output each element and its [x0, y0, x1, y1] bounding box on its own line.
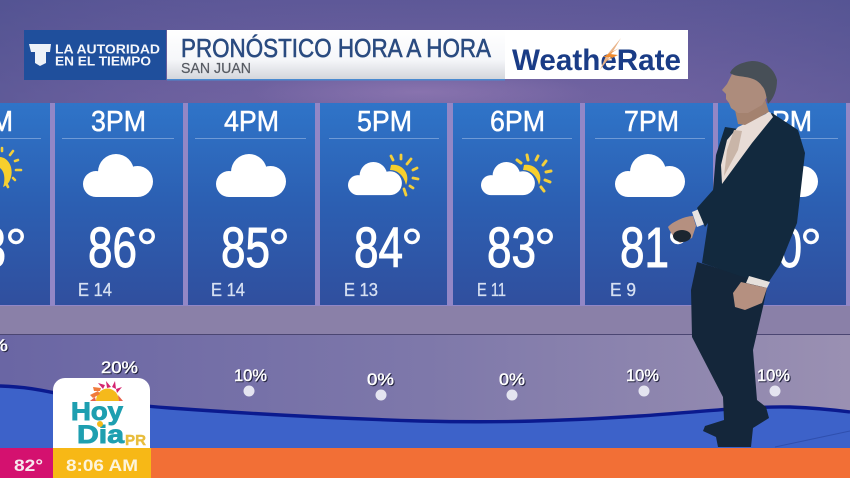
- icon: sun and cloud: [481, 155, 551, 195]
- card: 7PM: 7PM: [624, 106, 679, 138]
- header: WeatheRate logo: [505, 30, 688, 79]
- header: Telemundo tag: [24, 30, 166, 80]
- icon: cloud: [216, 154, 286, 197]
- time chip: 8:06 AM: [66, 456, 138, 475]
- jacket: [697, 113, 805, 283]
- icon: cloud: [83, 154, 153, 197]
- presenter: [668, 61, 805, 447]
- far hand and cuff: [668, 216, 696, 243]
- icon: cloud: [615, 154, 685, 197]
- card: 6PM: 6PM: [490, 106, 545, 138]
- hair: [730, 61, 777, 104]
- card: 7PM: E 9: [610, 280, 636, 300]
- card: 4PM: E 14: [211, 280, 245, 300]
- card: 7PM: 81: [620, 216, 669, 280]
- card: 3PM: [55, 103, 183, 305]
- card: 5PM: E 13: [344, 280, 378, 300]
- rain percent labels: [0, 336, 790, 389]
- card: 6PM: [453, 103, 580, 305]
- rain percent labels: 10%: [626, 366, 659, 385]
- card: 5PM: °: [401, 217, 423, 279]
- cuff and near hand: [746, 276, 770, 288]
- bottom bar: [0, 448, 850, 478]
- header: title bar: PRONÓSTICO HORA A HORA: [181, 33, 492, 63]
- header: Telemundo tag: LA AUTORIDAD: [55, 42, 160, 56]
- card: 4PM: [188, 103, 315, 305]
- card: 5PM: 84: [354, 216, 403, 280]
- icon: T logo: [29, 44, 51, 66]
- icon: sun: [90, 381, 123, 401]
- rain percent labels: 0%: [499, 370, 525, 389]
- rain percent labels: 0%: [367, 370, 394, 389]
- card: 3PM: °: [136, 217, 158, 279]
- card: 3PM: 86: [88, 216, 137, 280]
- card: 3PM: E 14: [78, 280, 112, 300]
- icon: cloud: [748, 154, 818, 197]
- card: 2PM (cropped): °: [5, 217, 27, 279]
- trousers and shoes: [691, 262, 769, 447]
- card: 6PM: E 11: [477, 280, 506, 300]
- card: 2PM (cropped): [0, 103, 50, 305]
- temperature chip: [0, 448, 53, 478]
- logo: Hoy Día PR: PR: [125, 432, 146, 449]
- logo: Hoy Día PR: Dia: [77, 421, 125, 449]
- card: 6PM: 83: [487, 216, 536, 280]
- card: 3PM: 3PM: [91, 106, 146, 138]
- neck: [735, 96, 769, 125]
- card: 8PM: 8PM: [757, 106, 812, 138]
- card: 4PM: °: [268, 217, 290, 279]
- rain data points: [244, 386, 780, 400]
- logo: Hoy Día PR: Hoy: [71, 398, 123, 426]
- card: 7PM: °: [667, 217, 689, 279]
- rain percent labels: 20%: [101, 358, 138, 377]
- card: 8PM: °: [800, 217, 822, 279]
- time chip: [53, 448, 151, 478]
- header: title bar: [167, 30, 505, 80]
- header: WeatheRate logo: WeatheRate: [512, 44, 681, 77]
- header: Telemundo tag: EN EL TIEMPO: [55, 54, 151, 68]
- card: 4PM: 85: [221, 216, 270, 280]
- head: [722, 68, 770, 113]
- header: title bar: SAN JUAN: [181, 61, 251, 77]
- card: 7PM: [585, 103, 713, 305]
- temperature chip: 82°: [14, 456, 43, 475]
- card: 5PM: [320, 103, 447, 305]
- card: 5PM: 5PM: [357, 106, 412, 138]
- rain percent labels: 10%: [234, 366, 267, 385]
- card: 4PM: 4PM: [224, 106, 279, 138]
- card: 6PM: °: [534, 217, 556, 279]
- panel strip: hourly forecast cards: [0, 103, 850, 306]
- card: 8PM: 80: [753, 216, 802, 280]
- logo: Hoy Día PR: [53, 378, 150, 449]
- area chart: rain probability: [0, 386, 850, 448]
- shirt and tie: [721, 112, 773, 184]
- card: 8PM: [718, 103, 846, 305]
- icon: sun and cloud: [348, 155, 418, 195]
- rain percent labels: 10%: [757, 366, 790, 385]
